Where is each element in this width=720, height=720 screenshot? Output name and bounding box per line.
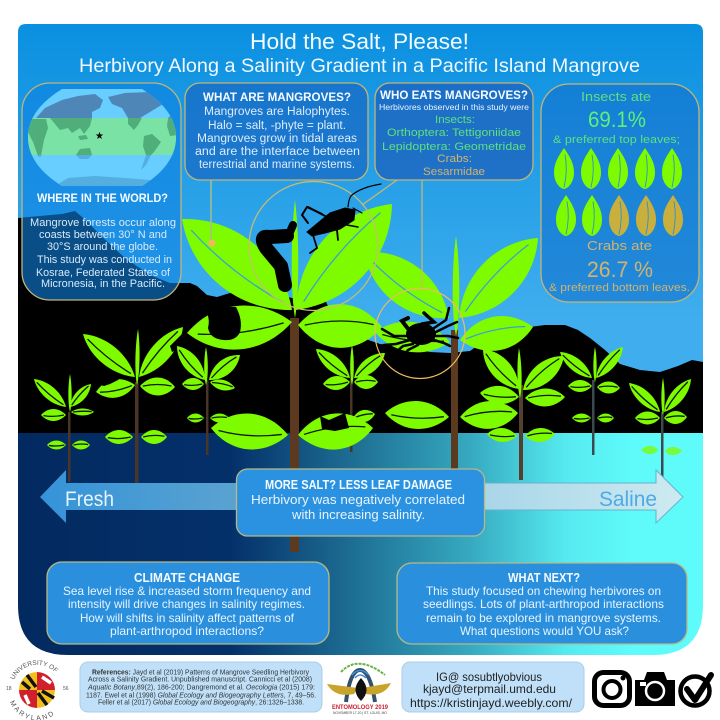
seedling: saline side [556,343,628,455]
logo: Entomology 2019 [327,664,391,715]
connector: who eats to crab circle [421,180,423,290]
logo: University of Maryland: 18 [6,686,12,692]
heading: WHO EATS MANGROVES? [380,90,528,102]
panel: what are mangroves [185,83,368,180]
text block: Mangroves are Halophytes. [204,106,350,118]
seedling: right of salt panel [476,342,570,480]
text block: What questions would YOU ask? [460,624,629,638]
text block: How will shifts in salinity affect patterns of [80,611,295,625]
text block: intensity will drive changes in salinity regimes. [68,597,305,611]
seedling: centre-left [171,341,245,455]
insect circle [249,182,378,310]
panel: contact details [402,662,584,712]
panel: more salt less leaf damage [236,469,484,536]
arrow: fresh [40,470,240,523]
panel: references [80,662,322,712]
seedling: left chewed [77,320,190,485]
panel: what next [397,563,687,644]
map landmasses tropical [28,118,178,156]
heading: CLIMATE CHANGE [134,571,240,585]
text block [195,106,360,171]
map landmasses south [38,155,155,186]
text block: terrestrial and marine systems. [199,159,355,171]
icon: camera [635,672,675,706]
text block [63,584,311,638]
icon: cricket [302,184,381,253]
sky lower band [368,324,703,372]
text block: kjayd@terpmail.umd.edu [423,682,556,696]
panel: who eats mangroves [375,83,533,180]
label: saline: Saline [599,488,657,511]
logo: Entomology 2019: NOVEMBER 17-20 | ST. LOUIS, MO [333,711,387,715]
text block: Aquatic Botany,89(2), 186-200; Dangremond et al. Oecologia (2015) 179: [87,682,315,692]
panel: where in the world [20,83,185,300]
insect list: Orthoptera: Tettigoniidae [387,127,521,139]
stat note: bottom leaves: & preferred bottom leaves. [549,282,690,294]
text block: seedlings. Lots of plant-arthropod interactions [423,597,664,611]
text block: Feller et al (2017) Global Ecology and Biogeography, 26:1326–1338. [98,698,304,706]
sky [18,24,703,324]
icon: instagram [594,672,630,706]
crab list: Sesarmidae [423,166,485,178]
icon: caterpillar [263,225,293,285]
water gradient [18,433,703,658]
logo: Entomology 2019: ENTOMOLOGY 2019 [332,704,388,711]
text block: coasts between 30° N and [39,229,167,241]
logo: University of Maryland: 56 [63,686,69,692]
subtitle: Herbivory Along a Salinity Gradient in a Pacific Island Mangrove [79,56,640,77]
island hill silhouette [18,211,703,435]
chew mark: second left leaf [207,307,241,340]
heading: WHAT ARE MANGROVES? [203,90,351,104]
text block: Mangroves grow in tidal areas [197,133,357,145]
connector: what are mangroves to leaf [210,180,212,243]
text block [410,670,573,710]
text block [86,668,316,706]
insect list: Insects: [435,114,475,126]
label: fresh: Fresh [65,488,114,511]
text block: Mangrove forests occur along [30,217,176,229]
text block: This study was conducted in [37,254,172,266]
heading: WHAT NEXT? [508,571,580,585]
seedling: far right [625,375,696,487]
text block: Herbivory was negatively correlated [251,493,465,507]
heading: WHERE IN THE WORLD? [37,193,168,205]
insect list: Lepidoptera: Geometridae [382,141,526,153]
crab list: Crabs: [437,153,472,165]
map landmasses north [36,92,178,118]
marker dot [208,240,216,246]
plant: main large mangrove [165,186,412,552]
insect list [382,114,526,153]
panel: leaf damage statistics [541,84,699,302]
text block: IG@ sosubtlyobvious [436,670,542,684]
small seedling: far left [30,374,95,482]
icon: study site star: ★ [95,131,104,142]
connector: who eats to insect circle [362,180,397,205]
latitude band [28,118,176,155]
title: Hold the Salt, Please! [250,29,469,54]
crab list [423,153,485,178]
chew mark: second right leaf [362,302,386,313]
text block [423,584,664,638]
heading: MORE SALT? LESS LEAF DAMAGE [265,478,452,492]
icon: crab [382,308,458,354]
world map [28,89,176,186]
text block: References: Jayd et al (2019) Patterns of Mangrove Seedling Herbivory [92,668,309,676]
seedling: behind main stem [311,343,389,452]
stat label: crabs: Crabs ate [587,238,652,253]
icon: leaf grid [554,148,683,236]
stat label: insects: Insects ate [581,89,651,104]
text block: Kosrae, Federated States of [36,267,171,279]
text block: Micronesia, in the Pacific. [41,278,165,290]
text block [30,217,176,290]
plant: right large mangrove [351,223,553,475]
stat: 69.1%: 69.1% [588,107,646,132]
crab circle [375,288,465,378]
text block: https://kristinjayd.weebly.com/ [410,696,573,710]
text block: plant-arthropod interactions? [110,624,264,638]
text block [251,493,465,522]
text block: Halo = salt, -phyte = plant. [208,120,346,132]
text block: 30°S around the globe. [47,241,158,253]
stat note: top leaves: & preferred top leaves; [553,134,680,146]
subheading: Herbivores observed in this study were [379,103,530,112]
arrow: saline [484,470,683,523]
text block: with increasing salinity. [291,508,425,522]
stat: 26.7%: 26.7 % [587,257,653,282]
text block: This study focused on chewing herbivores on [426,584,661,598]
panel: climate change [47,562,329,644]
text block: Across a Salinity Gradient. Unpublished manuscript. Cannicci et al (2008) [88,674,312,684]
chew mark: lower right leaf [320,413,349,431]
text block: and are the interface between [195,146,360,158]
text block: Sea level rise & increased storm frequency and [63,584,311,598]
logo: University of Maryland [6,660,69,720]
text block: 1187. Ewel et al (1998) Global Ecology and Biogeography Letters, 7, 49–56. [86,690,316,700]
text block: remain to be explored in mangrove systems. [426,611,661,625]
logo: University of Maryland: UNIVERSITY OF [10,660,58,679]
icon: check mark [680,675,711,706]
